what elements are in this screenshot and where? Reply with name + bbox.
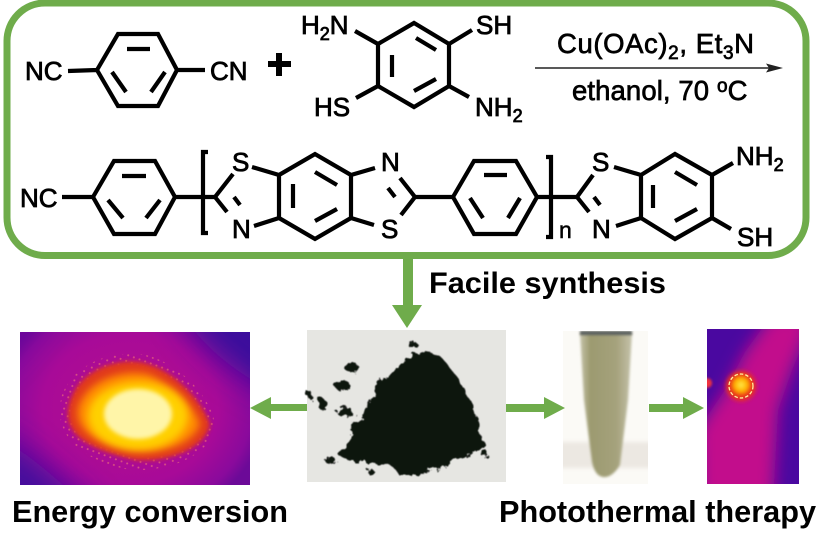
label: NH2: 2 bbox=[513, 106, 523, 126]
arrow: powder to tube bbox=[506, 397, 565, 419]
arrow line bbox=[535, 67, 770, 69]
label: N right: N bbox=[381, 147, 400, 177]
label: S end: S bbox=[592, 147, 609, 177]
dashed circle bbox=[729, 374, 753, 398]
label: energy conversion: Energy conversion bbox=[12, 495, 288, 529]
conditions: catalyst: 2 bbox=[668, 43, 679, 64]
bonds: benzobisthiazole bbox=[215, 154, 453, 239]
arrow: powder to energy conversion bbox=[250, 397, 307, 419]
hot spot left edge bbox=[702, 378, 712, 388]
bonds: terephthalonitrile ring bbox=[68, 34, 205, 106]
label: CN: CN bbox=[210, 56, 248, 86]
label: NC end group: NC bbox=[20, 183, 58, 213]
bonds: second phenyl bbox=[453, 161, 577, 234]
molecule: terephthalonitrile bbox=[25, 34, 248, 106]
dot halo bbox=[60, 354, 215, 470]
heading: facile synthesis: Facile synthesis bbox=[429, 267, 666, 300]
molecule: diaminobenzenedithiol bbox=[301, 10, 523, 126]
label: N end: N bbox=[592, 214, 611, 244]
conditions: solvent and temperature: ethanol, 70 bbox=[572, 75, 709, 106]
reaction arrow with conditions bbox=[535, 28, 783, 106]
image: dispersion in tube bbox=[563, 331, 648, 484]
heat blob yellow bbox=[88, 382, 188, 450]
image: black powder photo bbox=[307, 330, 506, 482]
label: H2N: 2 bbox=[320, 24, 330, 44]
heat blob middle bbox=[78, 373, 200, 451]
label: HS: HS bbox=[314, 92, 350, 122]
label: H2N: H bbox=[301, 10, 320, 40]
image: thermal map energy conversion bbox=[20, 332, 250, 485]
magenta body bbox=[707, 329, 799, 484]
tumour hot spot bbox=[726, 371, 756, 401]
conditions: solvent and temperature: C bbox=[728, 75, 748, 106]
arrow: down to product bbox=[392, 259, 422, 328]
tube cap shadow bbox=[580, 331, 632, 335]
tube liquid bbox=[580, 333, 632, 477]
label: NH2 end: NH bbox=[736, 141, 774, 171]
bonds: diamino ring bbox=[355, 23, 472, 107]
label: S: S bbox=[232, 147, 249, 177]
label: NH2 end: 2 bbox=[774, 155, 784, 175]
conditions: solvent and temperature: o bbox=[717, 76, 728, 97]
label: photothermal therapy: Photothermal therapy bbox=[499, 495, 816, 529]
label: N: N bbox=[232, 214, 251, 244]
conditions: catalyst: 3 bbox=[723, 43, 734, 64]
bracket right bbox=[546, 157, 551, 237]
heat blob outer bbox=[68, 361, 210, 460]
heat blob core bbox=[104, 389, 172, 439]
label: SH end: SH bbox=[737, 222, 773, 252]
bonds: first phenyl bbox=[62, 161, 215, 234]
conditions: catalyst: Cu(OAc) bbox=[557, 28, 668, 59]
image: thermal map in vivo bbox=[707, 329, 799, 484]
label: SH: SH bbox=[476, 10, 512, 40]
conditions: catalyst: N bbox=[734, 28, 755, 59]
plus sign bbox=[268, 53, 291, 76]
bracket left bbox=[203, 152, 208, 233]
label: S right: S bbox=[381, 214, 398, 244]
label: NC: NC bbox=[25, 56, 63, 86]
arrow head bbox=[766, 64, 783, 72]
label: NH2: NH bbox=[475, 92, 513, 122]
powder pile bbox=[338, 350, 484, 476]
bonds: end benzothiazole bbox=[577, 154, 733, 239]
label: n: n bbox=[559, 217, 572, 243]
panel: synthesis scheme frame bbox=[7, 3, 806, 256]
conditions: catalyst: , Et bbox=[679, 28, 723, 59]
molecule: polymer product bbox=[20, 141, 784, 252]
label: H2N: N bbox=[330, 10, 349, 40]
arrow: tube to thermal map bbox=[649, 397, 704, 419]
powder specks bbox=[307, 341, 488, 474]
